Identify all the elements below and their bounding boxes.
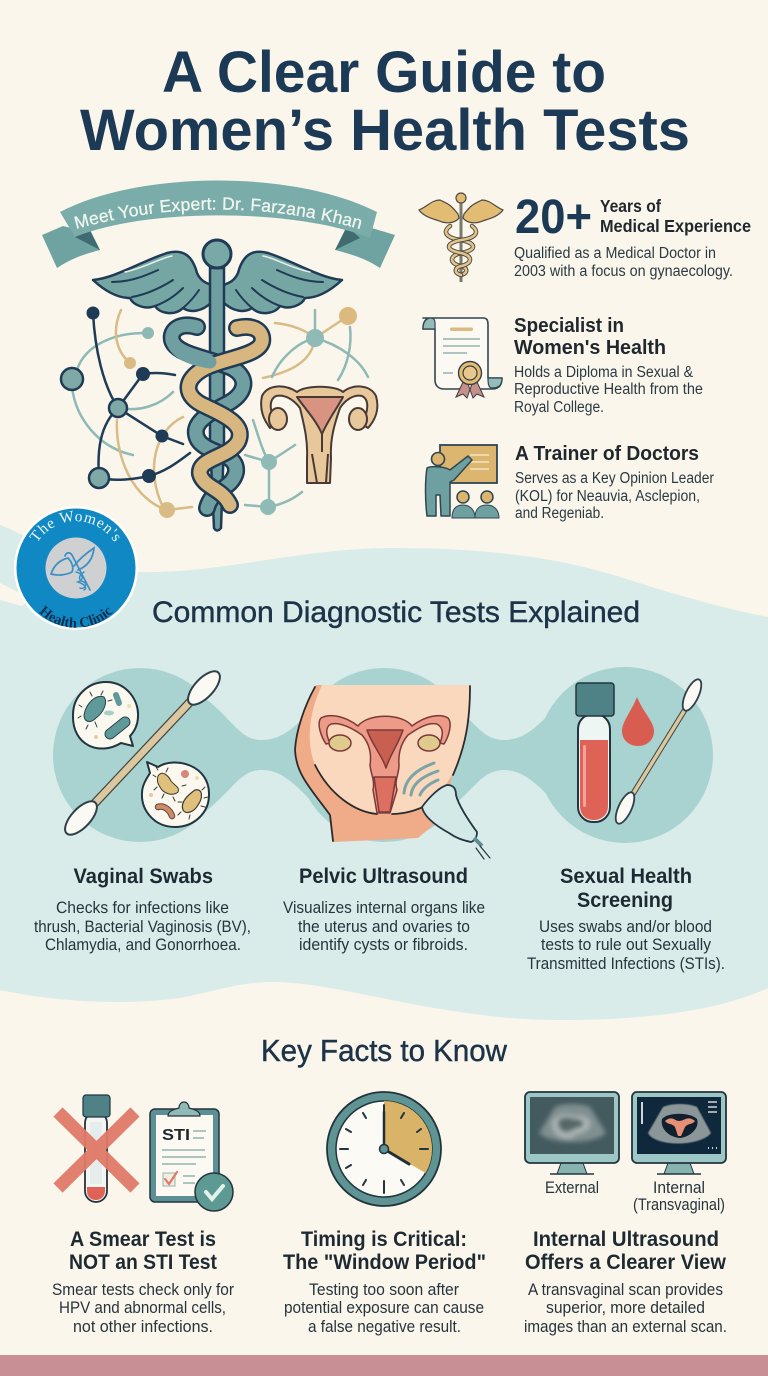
test: sexual health screening: tests to rule out Sexually bbox=[541, 936, 712, 954]
fact: smear test: Smear tests check only for bbox=[52, 1281, 234, 1299]
fact: window period: The "Window Period" bbox=[283, 1251, 486, 1274]
fact: internal ultrasound: Internal Ultrasound bbox=[533, 1228, 719, 1251]
fact: smear test bbox=[52, 1228, 234, 1336]
uterus diagram bbox=[319, 716, 450, 813]
clinic logo badge bbox=[14, 506, 138, 630]
test: sexual health screening: Transmitted Infections (STIs). bbox=[527, 955, 725, 973]
test: pelvic ultrasound: Pelvic Ultrasound bbox=[299, 865, 468, 888]
stat: trainer of doctors: (KOL) for Neauvia, Asclepion, bbox=[515, 488, 700, 505]
fact: smear test: A Smear Test is bbox=[70, 1228, 216, 1251]
test: vaginal swabs bbox=[34, 865, 251, 954]
test: vaginal swabs: Chlamydia, and Gonorrhoea. bbox=[45, 936, 241, 954]
monitor labels: Internal bbox=[653, 1179, 705, 1197]
connected teal circles backdrop bbox=[53, 667, 713, 843]
banner: Meet Your Expert: Meet Your Expert: Dr. Farzana Khan bbox=[74, 197, 362, 229]
clinic logo badge: The Women's bbox=[29, 510, 120, 542]
test: sexual health screening: Uses swabs and/or blood bbox=[539, 918, 712, 936]
network diagram: left bbox=[61, 306, 192, 518]
test: pelvic ultrasound: the uterus and ovaries to bbox=[298, 918, 470, 936]
clipboard bbox=[150, 1102, 233, 1211]
stat: 20+ years of experience bbox=[419, 191, 751, 282]
stat: specialist in women's health: Royal College. bbox=[514, 399, 604, 416]
icon: trainer at board bbox=[426, 445, 499, 518]
clinic logo badge: Health Clinic bbox=[38, 605, 113, 628]
network diagram: right bbox=[245, 307, 368, 515]
stat: trainer of doctors: and Regeniab. bbox=[515, 505, 604, 522]
test: pelvic ultrasound: identify cysts or fibroids. bbox=[299, 936, 468, 954]
icon: uterus illustration bbox=[261, 386, 377, 483]
speech bubble with teal bacteria bbox=[73, 682, 138, 749]
stat: 20+ years of experience: Medical Experience bbox=[600, 216, 751, 236]
stat: 20+ years of experience: Qualified as a Medical Doctor in bbox=[514, 245, 716, 262]
fact: window period: Timing is Critical: bbox=[301, 1228, 467, 1251]
stat: specialist in women's health: Women's Health bbox=[514, 337, 666, 359]
icon: large caduceus bbox=[93, 240, 342, 530]
ultrasound probe bbox=[422, 785, 477, 842]
stat: trainer of doctors bbox=[426, 443, 714, 522]
icon: blood tube, drop and swab bbox=[576, 677, 705, 826]
fact: internal ultrasound bbox=[524, 1228, 727, 1336]
icon: clock window period bbox=[327, 1092, 441, 1206]
bottom bar bbox=[0, 1355, 768, 1376]
icon: gold caduceus bbox=[419, 193, 503, 282]
test: vaginal swabs: Vaginal Swabs bbox=[74, 865, 213, 888]
fact: window period bbox=[283, 1228, 486, 1336]
monitor labels: External bbox=[545, 1179, 599, 1197]
fact: window period: Testing too soon after bbox=[309, 1281, 459, 1299]
title: A Clear Guide to bbox=[162, 40, 606, 105]
stat: specialist in women's health: Holds a Diploma in Sexual & bbox=[514, 364, 694, 381]
test: vaginal swabs: thrush, Bacterial Vaginosis (BV), bbox=[34, 918, 251, 936]
stat: specialist in women's health: Specialist in bbox=[514, 315, 624, 337]
fact: smear test: NOT an STI Test bbox=[69, 1251, 217, 1274]
heading: common diagnostic tests: Common Diagnostic Tests Explained bbox=[152, 596, 640, 629]
ultrasound waves bbox=[404, 763, 438, 795]
stat: 20+ years of experience: 20+ bbox=[515, 191, 592, 244]
heading: key facts: Key Facts to Know bbox=[261, 1033, 508, 1068]
fact: internal ultrasound: A transvaginal scan provides bbox=[528, 1281, 723, 1299]
monitor labels: (Transvaginal) bbox=[633, 1196, 725, 1214]
icon: internal scan monitor bbox=[632, 1092, 726, 1174]
stat: trainer of doctors: A Trainer of Doctors bbox=[515, 443, 699, 465]
fact: window period: a false negative result. bbox=[308, 1318, 461, 1336]
banner: Meet Your Expert bbox=[42, 180, 395, 268]
wave band background bbox=[0, 525, 768, 1020]
fact: smear test: not other infections. bbox=[73, 1318, 213, 1336]
stat: specialist in women's health: Reproductive Health from the bbox=[514, 381, 703, 398]
test: sexual health screening: Screening bbox=[577, 889, 673, 912]
fact: internal ultrasound: images than an external scan. bbox=[524, 1318, 727, 1336]
title bbox=[80, 40, 690, 163]
test: sexual health screening: Sexual Health bbox=[560, 865, 692, 888]
stat: 20+ years of experience: 2003 with a focus on gynaecology. bbox=[514, 263, 733, 280]
fact: window period: potential exposure can cause bbox=[284, 1299, 484, 1317]
fact: internal ultrasound: Offers a Clearer View bbox=[525, 1251, 727, 1274]
speech bubble with tan bacteria bbox=[142, 762, 209, 827]
icon: external scan monitor bbox=[525, 1092, 619, 1174]
test: pelvic ultrasound: Visualizes internal organs like bbox=[283, 899, 485, 917]
stat: specialist in women's health bbox=[423, 315, 703, 416]
monitor labels bbox=[545, 1179, 725, 1214]
icon: swab with bacteria bbox=[60, 666, 225, 840]
stat: trainer of doctors: Serves as a Key Opinion Leader bbox=[515, 470, 714, 487]
title: Women’s Health Tests bbox=[80, 98, 690, 163]
test: pelvic ultrasound bbox=[283, 865, 485, 954]
clipboard: STI bbox=[162, 1127, 190, 1144]
test: sexual health screening bbox=[527, 865, 725, 973]
stat: 20+ years of experience: Years of bbox=[600, 196, 661, 216]
icon: crossed-out tube and STI clipboard bbox=[58, 1095, 233, 1211]
fact: internal ultrasound: superior, more detailed bbox=[546, 1299, 705, 1317]
fact: smear test: HPV and abnormal cells, bbox=[59, 1299, 226, 1317]
icon: diploma scroll bbox=[423, 318, 502, 398]
test: vaginal swabs: Checks for infections like bbox=[56, 899, 229, 917]
icon: pelvic ultrasound bbox=[295, 685, 490, 859]
